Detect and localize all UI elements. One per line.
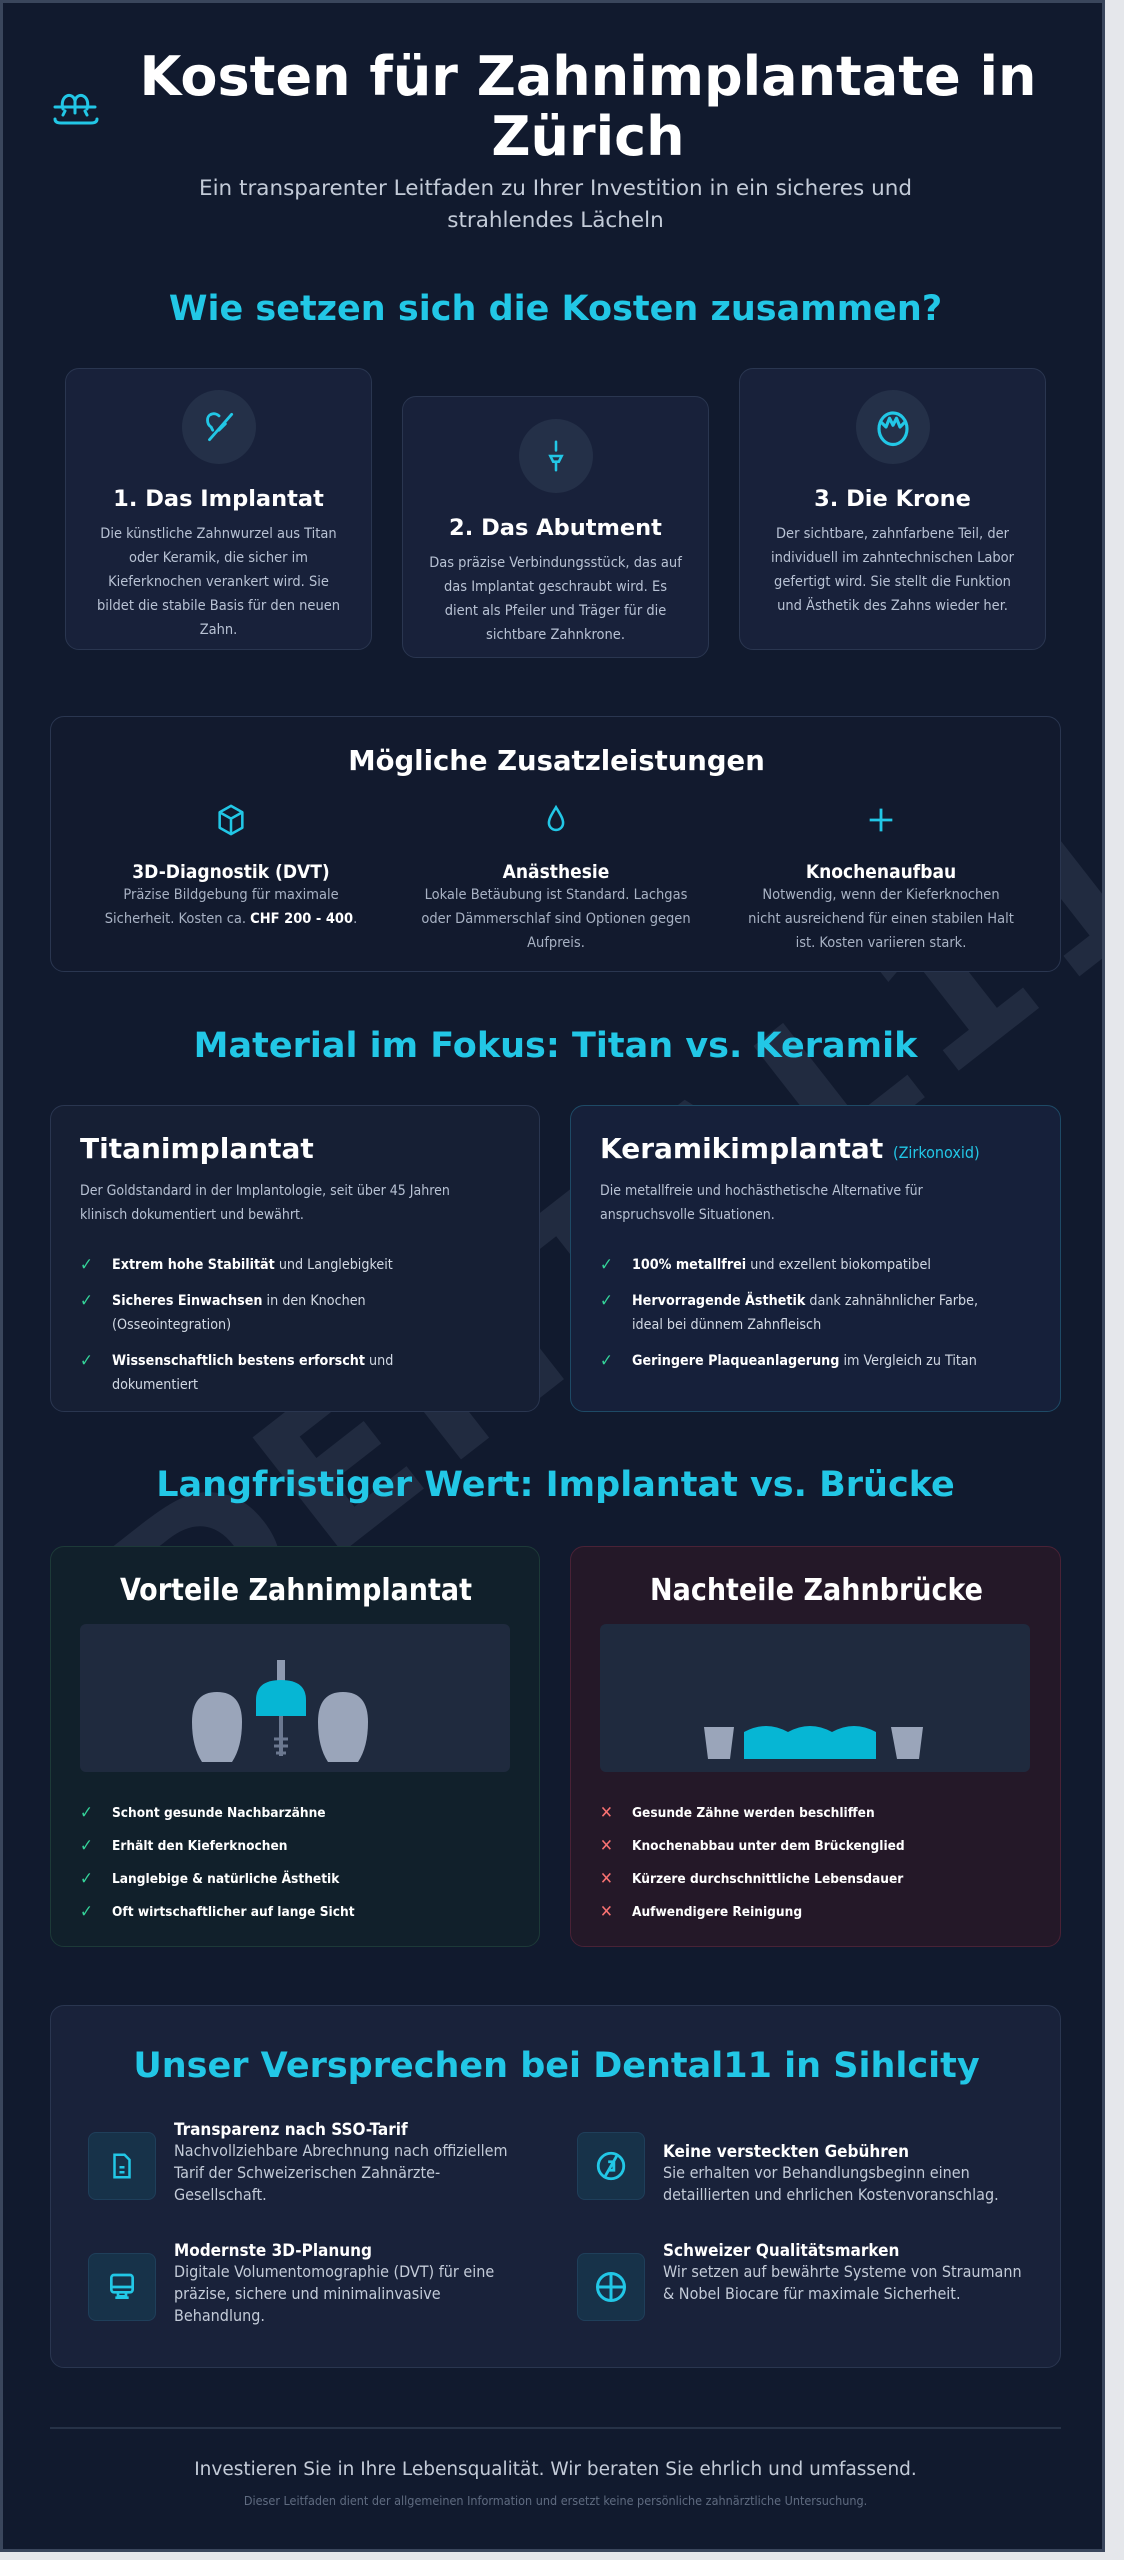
panel: Versprechen	[50, 2005, 1061, 2368]
card: Titan: ✓	[80, 1351, 93, 1371]
heading: Kosten: Wie setzen sich die Kosten zusammen?	[169, 289, 942, 329]
heading: Langfristiger Wert: Langfristiger Wert: Implantat vs. Brücke	[156, 1465, 955, 1505]
card: Nachteile: Kürzere durchschnittliche Lebensdauer	[632, 1871, 903, 1887]
item: Gebühren: Keine versteckten Gebühren	[663, 2142, 909, 2162]
card: Vorteile: Vorteile Zahnimplantat	[120, 1573, 472, 1608]
card: Implantat: 1. Das Implantat	[113, 486, 324, 512]
card: Nachteile: Aufwendigere Reinigung	[632, 1904, 802, 1920]
card: Keramik: Hervorragende Ästhetik dank zahnähnlicher Farbe, ideal bei dünnem Zahnfleisch	[632, 1293, 978, 1333]
card: Keramik: Keramikimplantat (Zirkonoxid)	[600, 1132, 980, 1165]
item: 3D	[88, 2241, 494, 2325]
card: Keramik: ✓	[600, 1255, 613, 1275]
card: Keramik: Geringere Plaqueanlagerung im Vergleich zu Titan	[632, 1353, 977, 1369]
card: Nachteile: ✕	[600, 1869, 613, 1889]
heading: Zusatzleistungen: Mögliche Zusatzleistungen	[348, 745, 765, 777]
item: SSO	[88, 2120, 508, 2204]
icon: abutment	[518, 419, 592, 493]
card: Vorteile: ✓	[80, 1869, 93, 1889]
card: Keramik: ✓	[600, 1291, 613, 1311]
item: Anästhesie: Anästhesie	[503, 861, 609, 883]
card: Nachteile: ✕	[600, 1803, 613, 1823]
item: SSO: Transparenz nach SSO-Tarif	[174, 2120, 408, 2140]
card: Krone	[739, 368, 1046, 650]
item: 3D: Digitale Volumentomographie (DVT) für eine präzise, sichere und minimalinvasive Behandlung.	[174, 2262, 494, 2325]
item: Knochenaufbau: Knochenaufbau	[806, 861, 956, 883]
card: Titan	[50, 1105, 540, 1412]
card: Implantat	[65, 368, 372, 650]
illustration: implant between teeth	[80, 1624, 510, 1772]
card: Keramik: ✓	[600, 1351, 613, 1371]
footer disclaimer: Dieser Leitfaden dient der allgemeinen Information und ersetzt keine persönliche zahnärztliche Untersuchung.	[244, 2493, 867, 2508]
card: Nachteile	[570, 1546, 1061, 1947]
card: Vorteile: Oft wirtschaftlicher auf lange Sicht	[112, 1904, 355, 1920]
icon: logo teeth	[54, 94, 98, 124]
item: DVT: 3D-Diagnostik (DVT)	[132, 861, 330, 883]
item: 3D: Modernste 3D-Planung	[174, 2241, 372, 2261]
card: Nachteile: Gesunde Zähne werden beschliffen	[632, 1805, 875, 1821]
card: Nachteile: Knochenabbau unter dem Brückenglied	[632, 1838, 905, 1854]
item: DVT	[105, 804, 357, 927]
card: Keramik: Die metallfreie und hochästhetische Alternative für anspruchsvolle Situationen.	[600, 1183, 923, 1223]
title: Kosten für Zahnimplantate in Zürich	[140, 45, 1036, 168]
card: Vorteile: ✓	[80, 1803, 93, 1823]
card: Implantat: Die künstliche Zahnwurzel aus Titan oder Keramik, die sicher im Kieferknochen verankert wird. Sie bildet die stabile Basis für den neuen Zahn.	[97, 526, 340, 638]
card: Titan: ✓	[80, 1291, 93, 1311]
item: Qualitätsmarken: Wir setzen auf bewährte Systeme von Straumann & Nobel Biocare für maximale Sicherheit.	[663, 2262, 1022, 2303]
heading: Versprechen: Unser Versprechen bei Dental11 in Sihlcity	[133, 2046, 980, 2086]
card: Titan: Extrem hohe Stabilität und Langlebigkeit	[112, 1257, 393, 1273]
card: Vorteile: ✓	[80, 1836, 93, 1856]
card: Vorteile: Schont gesunde Nachbarzähne	[112, 1805, 326, 1821]
item: Knochenaufbau	[748, 808, 1014, 951]
item: Anästhesie: Lokale Betäubung ist Standard. Lachgas oder Dämmerschlaf sind Optionen gegen Aufpreis.	[421, 887, 691, 951]
card: Vorteile	[50, 1546, 540, 1947]
item: Gebühren: Sie erhalten vor Behandlungsbeginn einen detaillierten und ehrlichen Kostenvoranschlag.	[663, 2163, 999, 2204]
icon: implant	[182, 390, 256, 464]
heading: Material: Material im Fokus: Titan vs. Keramik	[194, 1026, 917, 1066]
card: Krone: 3. Die Krone	[814, 486, 971, 512]
item: Knochenaufbau: Notwendig, wenn der Kieferknochen nicht ausreichend für einen stabilen Halt ist. Kosten variieren stark.	[748, 887, 1014, 951]
illustration: bridge	[600, 1624, 1030, 1772]
card: Vorteile: ✓	[80, 1902, 93, 1922]
footer text: Investieren Sie in Ihre Lebensqualität. Wir beraten Sie ehrlich und umfassend.	[194, 2459, 917, 2480]
card: Abutment	[402, 396, 709, 658]
item: Qualitätsmarken	[577, 2241, 1022, 2321]
item: Anästhesie	[421, 804, 691, 951]
card: Titan: Wissenschaftlich bestens erforscht und dokumentiert	[112, 1353, 393, 1393]
card: Keramik	[570, 1105, 1061, 1412]
card: Vorteile: Erhält den Kieferknochen	[112, 1838, 287, 1854]
item: Gebühren	[577, 2132, 999, 2204]
card: Titan: Der Goldstandard in der Implantologie, seit über 45 Jahren klinisch dokumentiert und bewährt.	[80, 1183, 450, 1223]
card: Keramik: 100% metallfrei und exzellent biokompatibel	[632, 1257, 931, 1273]
card: Nachteile: Nachteile Zahnbrücke	[650, 1573, 983, 1608]
card: Abutment: 2. Das Abutment	[449, 515, 662, 541]
icon: crown	[856, 390, 930, 464]
card: Nachteile: ✕	[600, 1836, 613, 1856]
card: Abutment: Das präzise Verbindungsstück, das auf das Implantat geschraubt wird. Es dient als Pfeiler und Träger für die sichtbare Zahnkrone.	[429, 555, 682, 643]
panel: Zusatzleistungen	[50, 716, 1061, 972]
item: Qualitätsmarken: Schweizer Qualitätsmarken	[663, 2241, 899, 2261]
card: Titan: Sicheres Einwachsen in den Knochen (Osseointegration)	[112, 1293, 366, 1333]
card: Vorteile: Langlebige & natürliche Ästhetik	[112, 1871, 339, 1887]
card: Titan: Titanimplantat	[80, 1132, 314, 1165]
card: Nachteile: ✕	[600, 1902, 613, 1922]
subtitle: Ein transparenter Leitfaden zu Ihrer Investition in ein sicheres und strahlendes Lächeln	[199, 176, 912, 233]
item: DVT: Präzise Bildgebung für maximale Sicherheit. Kosten ca. CHF 200 - 400.	[105, 887, 357, 927]
item: SSO: Nachvollziehbare Abrechnung nach offiziellem Tarif der Schweizerischen Zahnärzte-Gesellschaft.	[174, 2141, 508, 2204]
card: Krone: Der sichtbare, zahnfarbene Teil, der individuell im zahntechnischen Labor gefertigt wird. Sie stellt die Funktion und Ästhetik des Zahns wieder her.	[771, 526, 1014, 614]
card: Titan: ✓	[80, 1255, 93, 1275]
